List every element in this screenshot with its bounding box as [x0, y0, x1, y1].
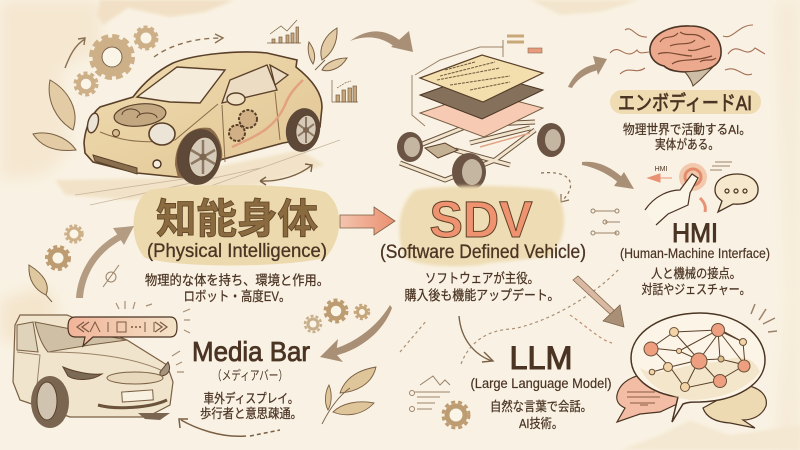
text: HMI description [642, 266, 750, 297]
door swirl [232, 80, 303, 147]
pill heading: Embodied AI: エンボディードAI [618, 92, 752, 115]
icon: brain [610, 25, 765, 86]
notes [507, 36, 524, 42]
chassis frame [400, 122, 535, 180]
arrow: two-way under car [260, 164, 312, 185]
text: LLM description [490, 399, 592, 431]
headlights [63, 367, 102, 380]
code lines [437, 62, 510, 90]
rear right wheel [537, 123, 565, 157]
side windows [222, 65, 277, 103]
windshield [35, 322, 127, 352]
arrow: SDV to LLM [459, 316, 493, 362]
text: SDV description: 購入後も機能アップデート。 [404, 287, 560, 303]
text: LLM description: 自然な言葉で会話。 [490, 399, 592, 414]
blob: physical intelligence [134, 185, 339, 266]
text: physical intelligence description: ロボット・高度EV。 [184, 288, 290, 304]
icon: HMI touch hand [645, 162, 732, 225]
headlights [149, 123, 175, 145]
main bubble wash [640, 357, 760, 400]
car body [84, 52, 322, 178]
icon: rays around callout [116, 301, 190, 372]
rear wheel [282, 105, 324, 155]
icon: HMI speech bubble [715, 174, 758, 212]
left bubble [617, 374, 690, 422]
chart: small bars [332, 80, 358, 102]
text: media bar description: 車外ディスプレイ。 [204, 391, 298, 406]
text: SDV description: ソフトウェアが主役。 [425, 271, 539, 286]
layer: dark [420, 73, 543, 119]
arrow: dashed to SDV [541, 173, 571, 202]
arrow: to brain [568, 56, 607, 88]
arrow: dashed network path [400, 268, 620, 364]
heading: media bar: Media Bar [192, 336, 310, 367]
mirror [227, 93, 245, 105]
callout: media bar display [68, 317, 177, 346]
arrow: to media bar car [179, 419, 280, 436]
label: HMI full name: (Human-Machine Interface) [620, 246, 770, 261]
lower bumper [98, 400, 167, 408]
text: Embodied AI description: 物理世界で活動するAI。 [623, 122, 751, 137]
text: media bar description [200, 391, 302, 421]
right tyre [138, 413, 170, 420]
hood accent [100, 92, 280, 162]
label: media bar katakana: （メディアバー） [212, 368, 288, 383]
arrow: dashed over car [65, 34, 223, 68]
door gears [239, 110, 257, 128]
icon: gears left middle [46, 226, 82, 270]
side window [17, 322, 38, 352]
grille [93, 155, 137, 174]
icon: LLM side sketch and gear [410, 376, 469, 428]
text: Embodied AI description: 実体がある。 [655, 137, 719, 152]
illustration: media bar car [13, 315, 173, 428]
text: SDV description [404, 271, 560, 303]
text: physical intelligence description [145, 273, 329, 304]
arrow: up to physical intelligence [76, 226, 134, 298]
label: LLM full name: (Large Language Model) [470, 375, 612, 391]
text: Embodied AI description [623, 122, 751, 152]
icon: leaf left middle [29, 265, 52, 302]
illustration: physical intelligence car [55, 52, 340, 205]
icon: gears top left [75, 27, 157, 95]
text: LLM description: AI技術。 [519, 416, 563, 431]
layer: yellow [420, 55, 543, 102]
road shadow [55, 150, 325, 200]
front wheel [452, 153, 486, 191]
heading: HMI: HMI [672, 218, 718, 248]
text: HMI description: 対話やジェスチャー。 [642, 282, 750, 297]
left bubble text [627, 392, 660, 405]
text: media bar description: 歩行者と意思疎通。 [200, 406, 302, 421]
arrow: physical intelligence to SDV [340, 207, 395, 235]
heading: SDV: SDV [430, 191, 532, 248]
illustration: SDV chassis and layers [397, 36, 565, 191]
right bubble [703, 385, 766, 428]
icon: small orbit [103, 265, 119, 287]
illustration: LLM speech bubbles [617, 313, 766, 428]
arrow: SDV to media bar [320, 305, 392, 362]
arrow: SDV to LLM speech bubbles [573, 276, 624, 327]
plate [122, 390, 153, 402]
arrow: to HMI [582, 162, 634, 189]
windshield [137, 67, 225, 103]
text: physical intelligence description: 物理的な体を持ち、環境と作用。 [145, 273, 329, 288]
emblem [112, 130, 120, 136]
icon: leaves right of car [308, 28, 347, 71]
chart: rising bars [267, 20, 301, 43]
front wheel [172, 126, 226, 188]
label: physical intelligence english: (Physical Intelligence) [147, 241, 327, 262]
network links [651, 330, 745, 388]
blob: SDV [399, 186, 564, 266]
grille [107, 372, 163, 384]
label: SDV english: (Software Defined Vehicle) [380, 242, 586, 263]
heading: LLM: LLM [510, 340, 572, 376]
network nodes [644, 324, 750, 392]
layer: pink [420, 92, 543, 137]
front wheel [31, 376, 69, 428]
text: HMI description: 人と機械の接点。 [651, 266, 741, 281]
icon: HMI touch hand: HMI [655, 166, 667, 173]
icon: gears center bottom [305, 300, 369, 332]
icon: rays by bubble [751, 304, 777, 332]
hood engine gears [113, 101, 167, 129]
icon: small circuit nodes [591, 209, 620, 235]
hood lines [17, 352, 165, 395]
left wheel [397, 132, 423, 162]
bracket lines [412, 40, 503, 126]
arrow: to chassis [350, 31, 413, 52]
main bubble [631, 313, 765, 422]
heading: physical intelligence: 知能身体 [156, 196, 318, 242]
icon: leaves left of car [33, 80, 76, 150]
icon: leaves bottom center [322, 367, 376, 424]
